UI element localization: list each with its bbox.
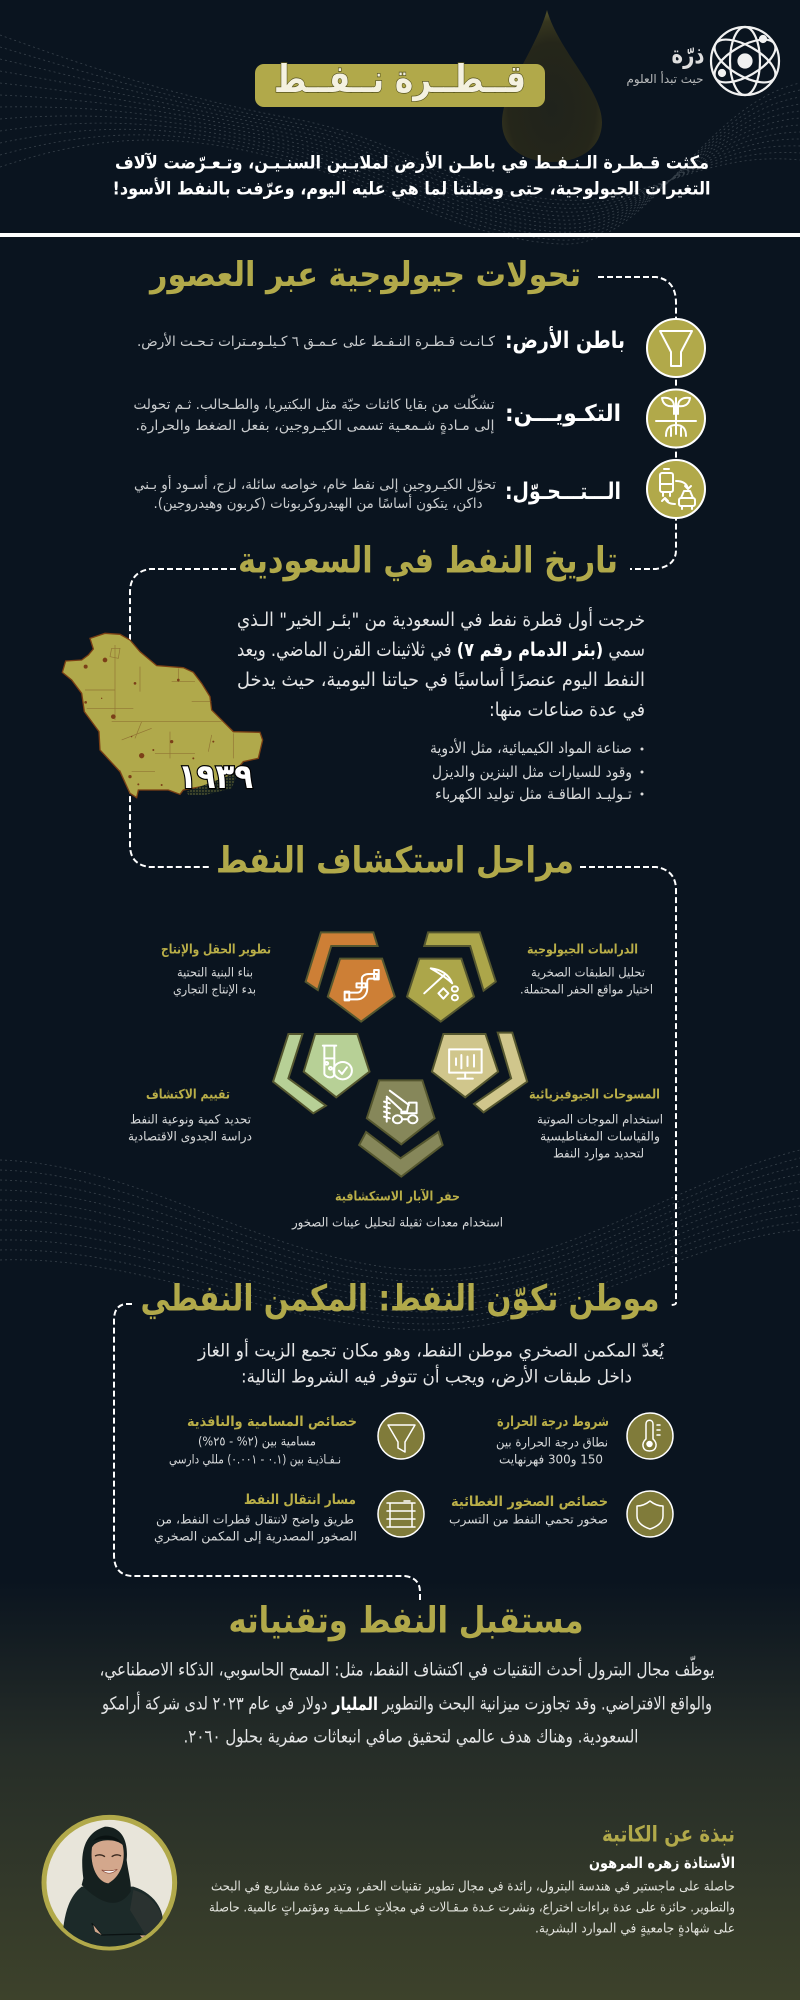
stage: exploration assessment (273, 1034, 370, 1113)
label: geological studies: اختيار مواقع الحفر المحتملة. (520, 982, 653, 998)
label: exploration assessment (128, 1088, 252, 1144)
intro: داخل طبقات الأرض، ويجب أن تتوفر فيه الشروط التالية: (241, 1364, 632, 1388)
paragraph (100, 1656, 714, 1748)
header (0, 10, 800, 237)
title: نبذة عن الكاتبة (602, 1822, 735, 1848)
heading: مستقبل النفط وتقنياته (228, 1600, 584, 1642)
paragraph: سمي (بئر الدمام رقم ٧) في ثلاثينات القرن الماضي. ويعد (237, 639, 645, 661)
icon: plant and roots (647, 390, 705, 448)
text: porosity and permeability (169, 1414, 357, 1468)
row label: subsurface: باطن الأرض: (505, 325, 625, 354)
row text: formation (134, 395, 495, 435)
heading: تاريخ النفط في السعودية (238, 540, 618, 582)
intro text (112, 152, 710, 200)
icon: funnel (647, 319, 705, 377)
label: geophysical surveys: والقياسات المغناطيسية (540, 1128, 660, 1144)
connector: section 1 (598, 277, 676, 569)
row label: transformation: الـــتـــحـوّل: (505, 479, 621, 505)
section: oil history in Saudi Arabia (62, 540, 645, 803)
logo name: ذرّة (672, 41, 704, 69)
paragraph (237, 607, 645, 721)
text: cap rock: صخور تحمي النفط من التسرب (449, 1512, 608, 1528)
text: migration path: طريق واضح لانتقال قطرات النفط، من (156, 1512, 354, 1528)
bio: على شهادةٍ جامعيةٍ في الموارد البشرية. (535, 1922, 735, 1937)
bio: والتطوير. حائزة على عدة براءات اختراع، ونشرت عـدة مـقـالات في مجلاتٍ عـلـمـية ومؤتمراتٍ عالمية. حاصلة (209, 1900, 735, 1916)
text: temperature conditions (496, 1414, 609, 1468)
section: reservoir (140, 1278, 673, 1544)
bullet list: تـوليـد الطاقـة مثل توليد الكهرباء (435, 785, 632, 803)
intro text: التغيرات الجيولوجية، حتى وصلتنا لما هي عليه اليوم، وعرّفت بالنفط الأسود! (112, 178, 710, 200)
paragraph: خرجت أول قطرة نفط في السعودية من "بئـر الخير" الـذي (237, 607, 645, 631)
section: geological transformations (134, 255, 705, 518)
bullet list (430, 738, 644, 803)
pentagon cycle diagram (273, 932, 527, 1177)
icon: barrel (378, 1491, 424, 1537)
logo tagline: حيث تبدأ العلوم (626, 71, 704, 87)
label: exploration assessment: تحديد كمية ونوعية النفط (130, 1112, 251, 1128)
connector: section 2 (130, 569, 236, 867)
intro (197, 1338, 665, 1388)
heading: تحولات جيولوجية عبر العصور (148, 255, 581, 295)
paragraph: النفط اليوم عنصرًا أساسيًا في حياتنا اليومية، حيث يدخل (237, 667, 645, 691)
label: geophysical surveys: لتحديد موارد النفط (553, 1146, 644, 1162)
bullet list: صناعة المواد الكيميائية، مثل الأدوية (430, 738, 632, 757)
text: porosity and permeability: نـفـاذيـة بين (٠.١ - ٠.٠٠١) مللي دارسي (169, 1452, 341, 1468)
paragraph: والواقع الافتراضي. وقد تجاوزت ميزانية البحث والتطوير المليار دولار في عام ٢٠٢٣ لدى شركة أرامكو (101, 1692, 712, 1714)
text: cap rock: خصائص الصخور الغطائية (451, 1494, 608, 1510)
author name: الأستاذة زهره المرهون (589, 1854, 735, 1872)
icon: thermometer (627, 1413, 673, 1459)
text: porosity and permeability: مسامية بين (٢% - ٢٥%) (198, 1434, 316, 1450)
title pill: قــطــرة نــفــط (274, 57, 526, 101)
wave pattern middle (0, 1150, 800, 1330)
label: field development (161, 942, 271, 998)
year 1939: ١٩٣٩ (178, 757, 253, 797)
label: geological studies: تحليل الطبقات الصخرية (531, 964, 645, 980)
paragraph: السعودية. وهناك هدف عالمي لتحقيق صافي انبعاثات صفرية بحلول ٢٠٦٠. (184, 1726, 638, 1748)
row text: transformation: تحوّل الكيـروجين إلى نفط خام، خواصه سائلة، لزج، أسـود أو بـني (134, 475, 496, 493)
oil drop (502, 10, 602, 162)
intro text: مكثت قـطـرة الـنـفـط في باطـن الأرض لملايـين السنـيـن، وتـعـرّضت لآلاف (115, 152, 709, 174)
section: exploration stages (128, 840, 663, 1230)
stage: exploratory drilling (359, 1080, 443, 1177)
stage: geological studies (407, 932, 496, 1022)
stage: field development (306, 932, 395, 1022)
bio: حاصلة على ماجستير في هندسة البترول، رائدة في مجال تطوير تقنيات الحفر، وتدير عدة مشاريع في البحث (211, 1880, 735, 1894)
label: field development: بناء البنية التحتية (177, 964, 253, 980)
intro: يُعدّ المكمن الصخري موطن النفط، وهو مكان تجمع الزيت أو الغاز (197, 1338, 665, 1362)
text: migration path (154, 1492, 357, 1544)
text: temperature conditions: شروط درجة الحرارة (497, 1414, 609, 1430)
stage: geophysical surveys (432, 1033, 527, 1112)
icon: shield (627, 1491, 673, 1537)
heading: موطن تكوّن النفط: المكمن النفطي (140, 1278, 660, 1320)
divider bar (0, 233, 800, 237)
section: about the author (44, 1817, 735, 1950)
bullet list: وقود للسيارات مثل البنزين والديزل (432, 763, 632, 781)
label: field development: تطوير الحقل والإنتاج (161, 942, 271, 958)
text: migration path: الصخور المصدرية إلى المكمن الصخري (154, 1528, 357, 1544)
map of Saudi Arabia (62, 633, 263, 798)
connector: section 3 (580, 867, 676, 1305)
connector: section 4 (114, 1304, 420, 1602)
label: exploration assessment: تقييم الاكتشاف (146, 1088, 230, 1102)
row text: transformation: داكن، يتكون أساسًا من الهيدروكربونات (كربون وهيدروجين). (154, 494, 482, 512)
row label: formation: التكـويـــن: (505, 401, 621, 427)
row text: subsurface: كـانـت قـطـرة النـفـط على عـمـق ٦ كـيلـومـترات تـحـت الأرض. (137, 332, 495, 350)
label: exploratory drilling (291, 1188, 503, 1230)
row text: formation: إلى مـادةٍ شـمعـية تسمى الكيـروجين، بفعل الضغط والحرارة. (136, 418, 495, 435)
icon: funnel (378, 1413, 424, 1459)
label: exploratory drilling: حفر الآبار الاستكشافية (335, 1188, 460, 1204)
label: field development: بدء الإنتاج التجاري (173, 982, 256, 998)
label: geological studies: الدراسات الجيولوجية (527, 942, 638, 958)
heading: مراحل استكشاف النفط (216, 840, 574, 882)
label: exploratory drilling: استخدام معدات ثقيلة لتحليل عينات الصخور (291, 1214, 503, 1230)
text: temperature conditions: نطاق درجة الحرارة بين (496, 1434, 608, 1450)
text: porosity and permeability: خصائص المسامية والنافذية (187, 1414, 357, 1430)
text: temperature conditions: 150 و300 فهرنهايت (499, 1452, 603, 1468)
paragraph: في عدة صناعات منها: (489, 699, 645, 721)
label: geophysical surveys: المسوحات الجيوفيزيائية (529, 1088, 660, 1102)
logo: atom (708, 27, 782, 95)
label: geological studies (520, 942, 653, 998)
wave pattern top (0, 35, 800, 244)
label: geophysical surveys: استخدام الموجات الصوتية (537, 1112, 663, 1128)
row text: transformation (134, 475, 496, 512)
label: exploration assessment: دراسة الجدوى الاقتصادية (128, 1128, 252, 1144)
text: migration path: مسار انتقال النفط (244, 1492, 356, 1508)
icon: transformation (647, 460, 705, 518)
row text: formation: تشكّلت من بقايا كائنات حيّة مثل البكتيريا، والطـحالب. ثـم تحولت (134, 395, 495, 413)
map halftone (187, 772, 238, 795)
label: geophysical surveys (529, 1088, 663, 1162)
section: future of oil (100, 1600, 714, 1748)
text: cap rock (449, 1494, 608, 1528)
portrait (44, 1817, 175, 1950)
bio (209, 1880, 735, 1937)
